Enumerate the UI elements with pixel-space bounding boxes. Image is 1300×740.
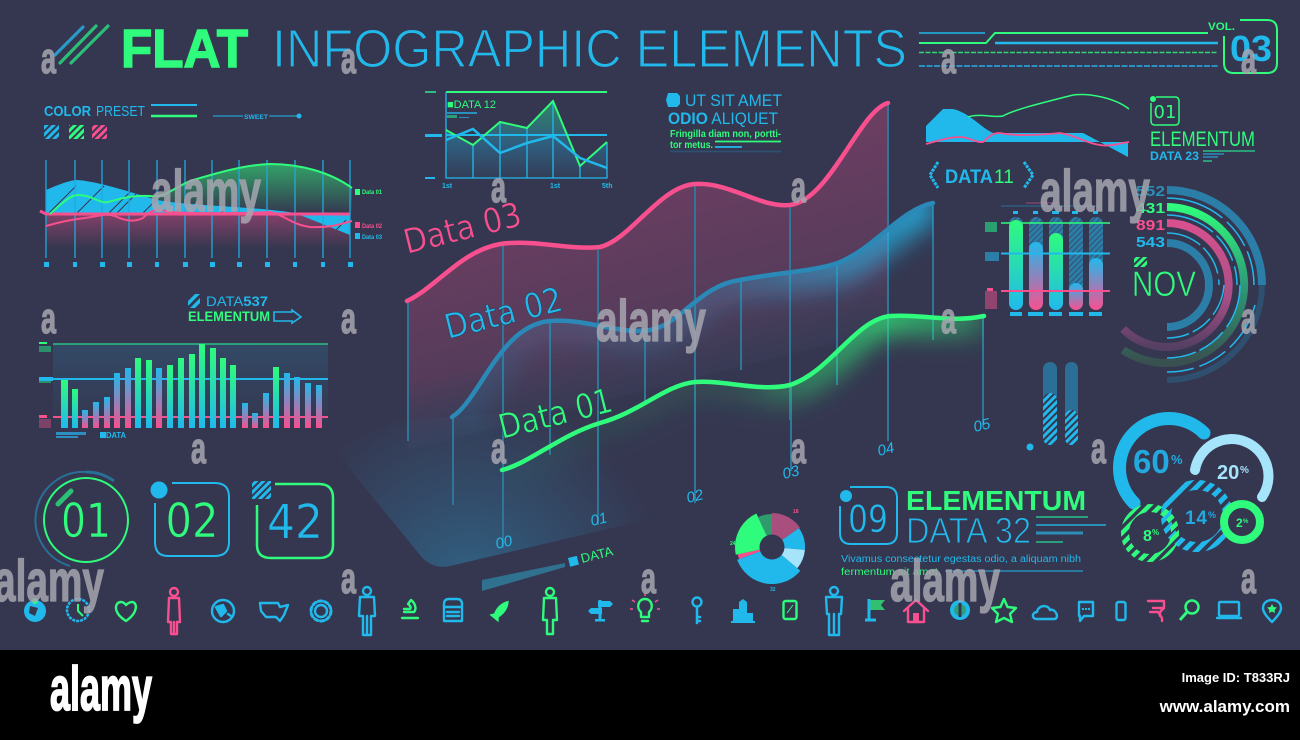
arc labels: 543 bbox=[1136, 234, 1165, 251]
label: data 11: 11 bbox=[994, 167, 1014, 188]
icon: man outline bbox=[826, 587, 842, 635]
arc labels: 891 bbox=[1136, 217, 1165, 234]
icon: signpost bbox=[588, 600, 613, 622]
area: data 03 bbox=[407, 103, 888, 450]
arrow: sweet bbox=[213, 112, 302, 121]
arc labels: 431 bbox=[1136, 200, 1165, 217]
gauge: 20%: % bbox=[1240, 465, 1249, 476]
pie labels: 32 bbox=[770, 587, 776, 593]
icon: microscope bbox=[402, 600, 418, 618]
chart: radial arcs bbox=[1123, 183, 1262, 380]
thin arcs bbox=[1167, 198, 1255, 372]
watermarks: alamy bbox=[151, 159, 261, 224]
watermarks: a bbox=[941, 294, 956, 343]
axis labels: 01 bbox=[589, 509, 609, 530]
line: data 03 bbox=[407, 103, 888, 301]
watermarks: a bbox=[1241, 34, 1256, 83]
icon: laptop bbox=[1217, 602, 1241, 618]
icon: house bbox=[904, 600, 928, 622]
pink line bbox=[46, 210, 352, 227]
arrow: sweet: SWEET bbox=[244, 114, 268, 121]
caption bbox=[56, 431, 126, 440]
filled bars bbox=[1009, 220, 1103, 310]
pie labels bbox=[730, 509, 799, 593]
line: data 02 bbox=[452, 203, 933, 417]
icon: phone bbox=[1116, 602, 1126, 620]
watermarks: a bbox=[1091, 424, 1106, 473]
label: data 11 bbox=[930, 162, 1033, 188]
line: data 01 bbox=[502, 316, 984, 470]
box: 03 bbox=[1224, 20, 1277, 73]
gauge: 8%: % bbox=[1152, 528, 1159, 537]
swatches bbox=[44, 125, 107, 139]
small stripes bbox=[447, 112, 477, 118]
watermarks: a bbox=[341, 294, 356, 343]
icon: bulb bbox=[630, 593, 660, 621]
box: 09 elementum: fermentum sit amet. bbox=[841, 567, 941, 578]
chart: capsule bars bbox=[985, 203, 1110, 316]
badge: 01: 01 bbox=[61, 494, 111, 549]
axis labels: 5th bbox=[602, 183, 612, 190]
icon: star bbox=[992, 599, 1016, 622]
axis ticks bbox=[44, 262, 353, 267]
badge: 02 bbox=[150, 482, 229, 556]
heading: data537: ELEMENTUM bbox=[188, 308, 270, 324]
area glow: data 02 bbox=[452, 203, 933, 417]
subheading: data 32: DATA 32 bbox=[906, 510, 1031, 551]
chart: data 12 line chart bbox=[425, 91, 612, 190]
watermarks: alamy bbox=[596, 289, 706, 354]
icon: woman green bbox=[543, 588, 557, 634]
gauge: 60%: % bbox=[1171, 452, 1183, 467]
heading: data537 bbox=[188, 293, 301, 324]
icon: rocket bbox=[489, 597, 513, 622]
box: 09 elementum: 09 bbox=[848, 498, 888, 541]
icon: man bbox=[359, 587, 375, 635]
text block: lorem: Vivamus consectetur egestas odio, a aliquam nibh bbox=[841, 554, 1081, 565]
icon: usa map bbox=[260, 603, 288, 621]
watermarks: a bbox=[641, 554, 656, 603]
chart: bar chart bbox=[39, 342, 328, 440]
3d floor bbox=[340, 400, 740, 567]
box: 01 elementum bbox=[1150, 96, 1255, 163]
icon: globe bbox=[212, 600, 234, 622]
icon: tablet bbox=[784, 601, 796, 619]
watermarks bbox=[0, 34, 1256, 614]
gauge: 8% bbox=[1125, 508, 1175, 558]
gauge: 2% bbox=[1224, 504, 1260, 540]
icon: chat bbox=[1079, 602, 1093, 621]
badge: 42: 42 bbox=[267, 495, 323, 550]
axis labels: 1st bbox=[442, 183, 453, 190]
box: 01 elementum: DATA 23 bbox=[1150, 149, 1199, 163]
icon: cloud bbox=[1033, 606, 1057, 619]
label: data 11: DATA bbox=[945, 167, 993, 188]
watermarks: a bbox=[491, 163, 506, 212]
label: nov: NOV bbox=[1132, 265, 1197, 304]
volume header bbox=[919, 20, 1277, 73]
icon: gear bbox=[311, 601, 331, 621]
text block: ut sit amet: ODIO ALIQUET bbox=[668, 110, 778, 128]
gauges bbox=[1119, 418, 1269, 558]
cyan area bbox=[46, 180, 350, 235]
icon: archive bbox=[444, 599, 462, 621]
gauge: 20%: 20 bbox=[1217, 462, 1239, 484]
footer logo: alamy bbox=[50, 655, 152, 724]
gauge: 60% bbox=[1119, 418, 1204, 503]
green area bbox=[50, 164, 352, 214]
chart: main 3d line chart bbox=[400, 103, 993, 591]
icon: magnifier bbox=[1180, 600, 1198, 620]
icon: flag bbox=[865, 599, 885, 620]
axis labels: 1st bbox=[550, 183, 561, 190]
watermarks: a bbox=[41, 294, 56, 343]
icon row bbox=[24, 587, 1281, 635]
badge: 01 bbox=[35, 472, 128, 566]
legend: Data 01 bbox=[362, 190, 383, 196]
icon: heart bbox=[116, 602, 136, 621]
icon: woman pink bbox=[168, 588, 180, 634]
footer image id: Image ID: T833RJ bbox=[1182, 670, 1290, 685]
green line bbox=[50, 164, 352, 214]
vertical capsules bbox=[1026, 362, 1078, 450]
heading: FLAT: FLAT bbox=[121, 19, 248, 79]
icon: key bbox=[692, 598, 702, 623]
axis labels: 02 bbox=[685, 486, 706, 507]
text block: ut sit amet: UT SIT AMET bbox=[685, 92, 782, 110]
chart: mini area bbox=[926, 95, 1129, 157]
pie labels: 24 bbox=[730, 541, 736, 547]
ticks bbox=[1010, 211, 1102, 316]
axis labels bbox=[494, 415, 993, 553]
gauge: 8%: 8 bbox=[1143, 528, 1152, 545]
heading: elementum: ELEMENTUM bbox=[906, 485, 1086, 516]
legend: Data 03 bbox=[362, 235, 383, 241]
gauge: 14%: % bbox=[1208, 510, 1216, 520]
legend marks bbox=[985, 222, 999, 309]
label: data 02: Data 02 bbox=[441, 280, 567, 348]
badge: 02: 02 bbox=[166, 494, 218, 549]
axis labels: 03 bbox=[781, 462, 802, 483]
hatched tracks bbox=[1009, 217, 1103, 310]
watermarks: a bbox=[41, 34, 56, 83]
label: data 01: Data 01 bbox=[495, 381, 617, 448]
text block: ut sit amet bbox=[666, 92, 782, 152]
icon: coin bbox=[950, 600, 970, 620]
footer url: www.alamy.com bbox=[1159, 697, 1290, 716]
icon: map pin bbox=[1263, 600, 1281, 622]
drop lines bbox=[408, 105, 983, 548]
axis labels: 05 bbox=[972, 415, 993, 436]
heading: data537: DATA537 bbox=[206, 293, 268, 309]
box: 01 elementum: 01 bbox=[1154, 102, 1176, 123]
watermarks: a bbox=[341, 554, 356, 603]
number: 03: 03 bbox=[1230, 28, 1272, 69]
icon: route bbox=[1148, 601, 1164, 621]
watermarks: alamy bbox=[890, 549, 1000, 614]
heading: INFOGRAPHIC ELEMENTS: INFOGRAPHIC ELEMENTS bbox=[272, 19, 907, 79]
gauge: 14%: 14 bbox=[1185, 508, 1207, 529]
label: data 03: Data 03 bbox=[400, 195, 526, 263]
watermarks: a bbox=[1241, 554, 1256, 603]
vertical lines bbox=[46, 160, 350, 258]
heading: color preset: COLOR bbox=[44, 103, 91, 120]
pie labels: 18 bbox=[793, 509, 799, 515]
gauge: 2%: % bbox=[1243, 519, 1249, 525]
title bbox=[55, 19, 907, 79]
watermarks: a bbox=[941, 34, 956, 83]
legend: Data 02 bbox=[362, 224, 383, 230]
axis labels: 00 bbox=[494, 532, 515, 553]
baseline bbox=[40, 211, 350, 214]
badge: 42 bbox=[252, 481, 333, 558]
box: 09 elementum bbox=[840, 485, 1106, 578]
footer band bbox=[0, 650, 1300, 740]
watermarks: a bbox=[191, 424, 206, 473]
arc labels bbox=[1136, 183, 1165, 251]
panel: color preset bbox=[44, 103, 302, 139]
icon: globe pin bbox=[24, 598, 46, 622]
watermarks: a bbox=[1241, 294, 1256, 343]
legend marks bbox=[39, 342, 53, 428]
floor caption: DATA bbox=[579, 543, 615, 566]
gauge: 20% bbox=[1195, 439, 1269, 497]
legend bbox=[355, 189, 383, 241]
watermarks: a bbox=[491, 424, 506, 473]
chart: multi line area bbox=[40, 160, 383, 267]
box: 01 elementum: ELEMENTUM bbox=[1150, 128, 1255, 151]
gauge: 2%: 2 bbox=[1236, 516, 1243, 530]
floor caption bbox=[482, 543, 615, 591]
arc labels: 552 bbox=[1136, 183, 1165, 200]
axis labels bbox=[425, 91, 612, 190]
gauge: 60%: 60 bbox=[1133, 443, 1170, 480]
caption: DATA bbox=[106, 431, 126, 440]
icon: title stripes bbox=[55, 26, 108, 63]
area glow: data 01 bbox=[561, 318, 984, 445]
watermarks: a bbox=[341, 34, 356, 83]
label: VOL: VOL. bbox=[1208, 21, 1235, 33]
watermarks: a bbox=[791, 163, 806, 212]
chart: pie bbox=[730, 509, 805, 593]
gauge: 14% bbox=[1166, 485, 1228, 547]
icon: clock bbox=[67, 599, 89, 621]
text block: ut sit amet: tor metus. bbox=[670, 140, 713, 151]
watermarks: a bbox=[791, 424, 806, 473]
label: data 12: ■DATA 12 bbox=[447, 99, 496, 111]
watermarks: alamy bbox=[1040, 159, 1150, 224]
text block: ut sit amet: Fringilla diam non, portti- bbox=[670, 129, 781, 140]
subheading: preset: PRESET bbox=[96, 103, 145, 120]
icon: city bbox=[731, 599, 755, 623]
bars bbox=[61, 344, 322, 428]
pink area bbox=[46, 214, 350, 248]
axis labels: 04 bbox=[876, 439, 896, 460]
